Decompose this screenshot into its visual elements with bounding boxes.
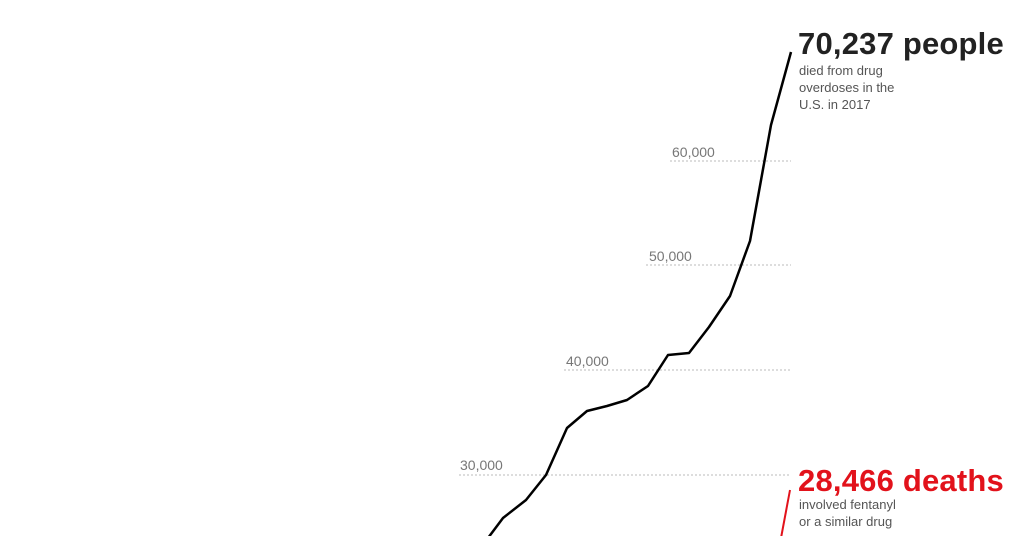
gridlines and axis labels: 60,000 <box>672 144 715 160</box>
gridlines and axis labels: 30,000 <box>460 457 503 473</box>
description <box>799 63 894 112</box>
description: U.S. in 2017 <box>799 97 871 112</box>
headline 70,237 people: 70,237 people <box>798 26 1004 61</box>
fentanyl line <box>781 490 790 536</box>
description: overdoses in the <box>799 80 894 95</box>
callout: total deaths <box>798 26 1004 112</box>
description: died from drug <box>799 63 883 78</box>
description: or a similar drug <box>799 514 892 529</box>
headline 28,466 deaths: 28,466 deaths <box>798 463 1004 498</box>
description: involved fentanyl <box>799 497 896 512</box>
gridlines and axis labels: 40,000 <box>566 353 609 369</box>
description <box>799 497 896 529</box>
gridlines and axis labels: 50,000 <box>649 248 692 264</box>
gridlines and axis labels <box>459 144 791 475</box>
callout: fentanyl deaths <box>798 463 1004 529</box>
total deaths line <box>488 52 791 536</box>
